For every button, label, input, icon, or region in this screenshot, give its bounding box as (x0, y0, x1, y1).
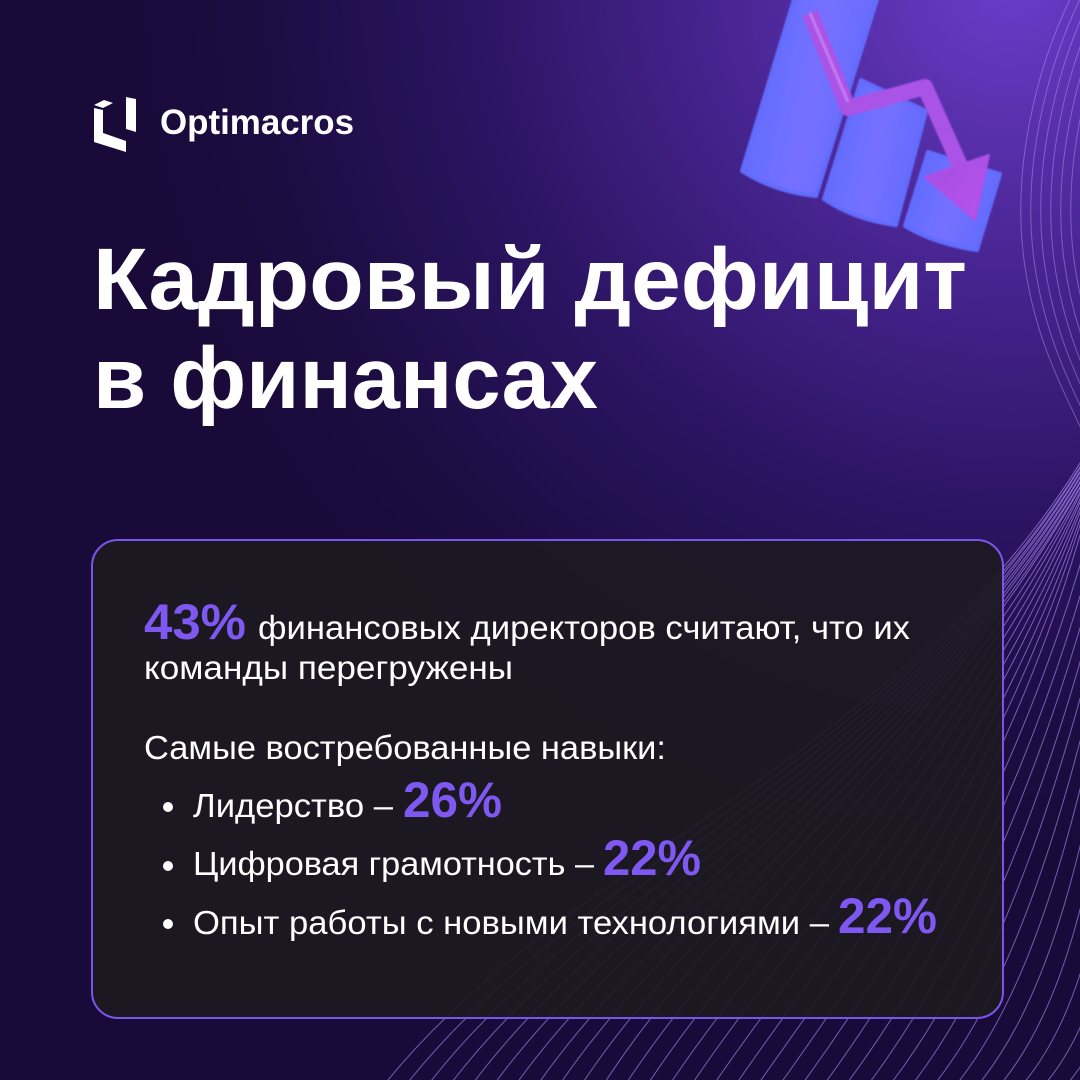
skill: leadership: Лидерство – (193, 787, 394, 824)
statement: overloaded teams: команды перегружены (144, 649, 513, 686)
3D falling bar chart icon (742, 0, 1000, 250)
title: Кадровый дефицит (93, 231, 967, 328)
skill: digital literacy: 22% (603, 830, 701, 886)
wave lines: bottom right (380, 455, 1080, 1080)
logo wordmark: Optimacros (160, 103, 354, 142)
skill: digital literacy (163, 830, 701, 886)
skill: new technologies: Опыт работы с новыми технологиями – (193, 904, 830, 941)
skill: leadership: 26% (403, 772, 502, 828)
skill: new technologies (163, 888, 937, 944)
wave lines: top right (1021, 0, 1080, 470)
statement: overloaded teams: финансовых директоров считают, что их (258, 609, 911, 646)
panel background (92, 540, 1003, 1018)
skill: digital literacy: Цифровая грамотность – (193, 845, 595, 882)
skills heading: Самые востребованные навыки: (144, 729, 666, 766)
logo mark (94, 97, 136, 152)
statement: overloaded teams (144, 594, 911, 686)
skill: new technologies: 22% (838, 888, 937, 944)
title: в финансах (93, 330, 598, 427)
title (93, 231, 967, 427)
chart bars (742, 0, 1000, 250)
skill: leadership (163, 772, 502, 828)
panel: statistics (92, 540, 1003, 1018)
statement: overloaded teams: 43% (144, 594, 246, 650)
falling arrow (810, 13, 989, 220)
logo (94, 97, 354, 152)
